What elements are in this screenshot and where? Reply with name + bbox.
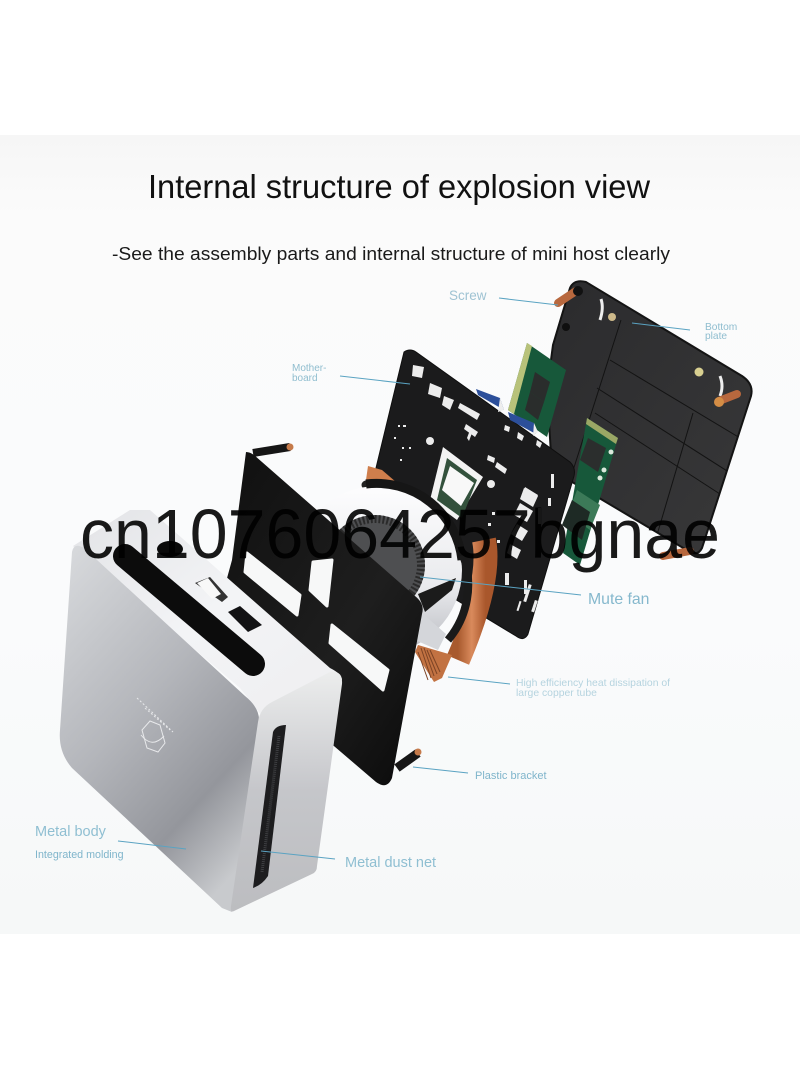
right face	[231, 672, 342, 911]
label: metal body: Metal body	[35, 824, 107, 840]
label: copper tube: large copper tube	[516, 688, 597, 699]
top face	[73, 510, 342, 716]
label: screw: Screw	[449, 288, 487, 303]
label: mute fan: Mute fan	[588, 591, 649, 608]
USB-C port	[228, 606, 262, 632]
screw bottom	[663, 551, 690, 556]
left face	[60, 546, 259, 912]
USB ports	[476, 389, 504, 410]
label: copper tube: High efficiency heat dissipation of	[516, 678, 670, 689]
label: motherboard: Mother-	[292, 363, 326, 374]
copper heat pipe and fins	[362, 466, 486, 682]
leader lines	[118, 298, 690, 859]
label: motherboard: board	[292, 373, 318, 384]
white components	[394, 365, 554, 612]
top slot	[125, 556, 253, 664]
screw top	[558, 291, 576, 303]
label: plastic bracket: Plastic bracket	[475, 770, 547, 782]
screw right	[719, 394, 737, 401]
SSD module	[562, 418, 618, 565]
metal body	[60, 510, 342, 912]
bottom plate	[547, 281, 760, 560]
title: Internal structure of explosion view	[148, 168, 650, 205]
USB-A port	[195, 577, 228, 602]
RAM module	[508, 343, 566, 437]
watermark: cn1076064257bgnae	[80, 495, 720, 573]
top black dot	[157, 541, 183, 557]
mute fan	[294, 483, 468, 654]
motherboard	[376, 350, 574, 639]
metal dust net	[253, 725, 286, 888]
background panel	[0, 135, 800, 934]
label: metal dust net: Metal dust net	[345, 855, 436, 871]
CPU window	[430, 447, 483, 520]
infographic canvas	[0, 135, 800, 934]
label: bottom plate: plate	[705, 331, 727, 342]
label: integrated molding: Integrated molding	[35, 849, 124, 861]
plastic bracket	[210, 444, 423, 785]
label: bottom plate: Bottom	[705, 322, 737, 333]
subtitle: -See the assembly parts and internal structure of mini host clearly	[112, 243, 671, 264]
logo	[137, 698, 173, 752]
